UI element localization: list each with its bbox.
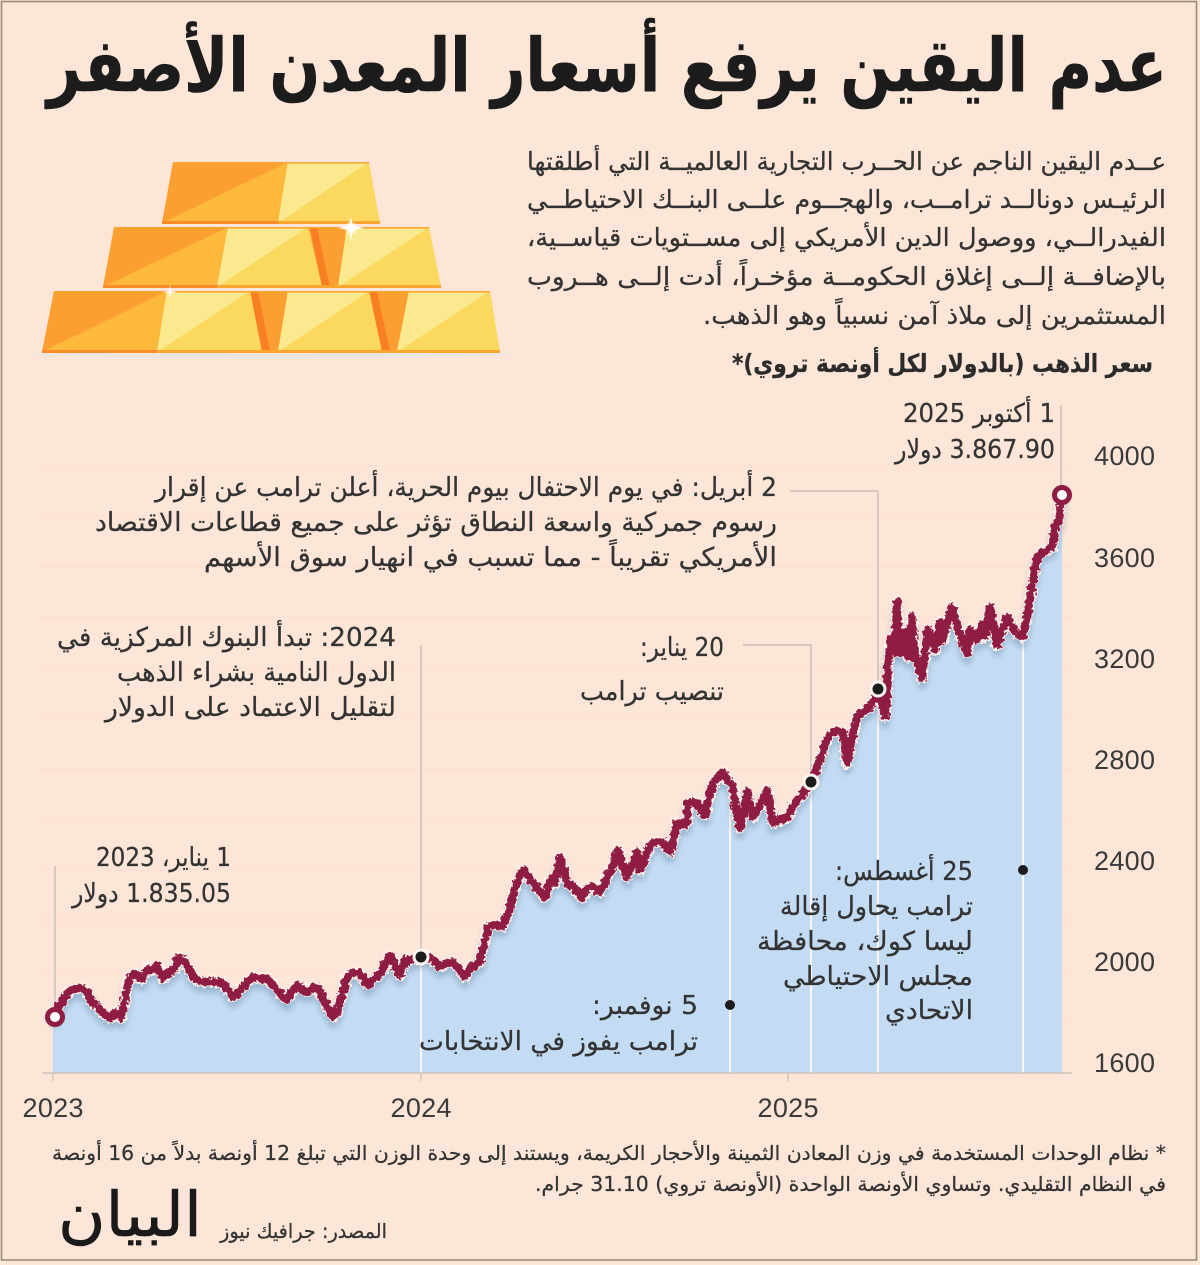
annotation: 2 April: رسوم جمركية واسعة النطاق تؤثر على جميع قطاعات الاقتصاد [95,508,777,538]
end marker [1054,488,1070,502]
annotation: 5 November: 5 نوفمبر: [592,991,698,1021]
annotation: 1 October 2025 [893,395,1055,465]
annotation: 20 January [580,633,724,707]
annotation: 25 August: ترامب يحاول إقالة [780,892,973,922]
y axis labels: 4000 [1094,441,1155,471]
annotation: 25 August: 25 أغسطس: [835,853,973,887]
start marker [48,1010,62,1024]
footnote: * نظام الوحدات المستخدمة في وزن المعادن الثمينة والأحجار الكريمة، ويستند إلى وحدة الوزن التي تبلغ 12 أونصة بدلاً من 16 أونصة [52,1140,1166,1166]
footnote [52,1140,1166,1197]
annotation: 1 October 2025: 3.867.90 دولار [893,435,1055,465]
annotation: 2 April [95,469,777,573]
area under the price line [53,495,1062,1073]
x axis labels: 2023 [22,1093,84,1123]
annotation: 25 August: مجلس الاحتياطي [783,962,973,992]
source: المصدر: جرافيك نيوز [219,1219,387,1243]
annotation: 25 August: ليسا كوك، محافظة [757,927,973,957]
footnote: في النظام التقليدي. وتساوي الأونصة الواحدة (الأونصة تروي) 31.10 جرام. [535,1172,1166,1197]
x axis labels [22,1093,818,1123]
annotation: 1 January 2023: 1 يناير، 2023 [96,843,231,873]
y axis labels: 3200 [1094,644,1155,674]
intro text block: الفيدرالــي، ووصول الدين الأمريكي إلى مســتويات قياســية، [527,221,1166,253]
annotation: 2024 central banks [57,619,396,723]
price line [55,495,1062,1024]
y axis labels: 2400 [1094,846,1155,876]
annotation: 5 November [419,991,698,1057]
annotation: 2024 central banks: 2024: تبدأ البنوك المركزية في [57,619,396,653]
intro text block: المستثمرين إلى ملاذ آمن نسبياً وهو الذهب. [703,298,1166,331]
white drop lines [421,637,1023,1073]
baseline and ticks [42,1073,1072,1081]
annotation: 2 April: 2 أبريل: في يوم الاحتفال بيوم الحرية، أعلن ترامب عن إقرار [153,469,777,503]
y axis labels [1094,441,1155,1078]
logo: Al Bayan: البيان [58,1178,202,1251]
annotation: 2 April: الأمريكي تقريباً - مما تسبب في انهيار سوق الأسهم [204,538,777,573]
intro text block: الرئيـس دونالــد ترامــب، والهجــوم علــى البنــك الاحتياطــي [527,185,1166,215]
event markers [414,682,1028,1010]
annotation: 2024 central banks: الدول النامية بشراء الذهب [117,658,396,688]
annotation: 5 November: ترامب يفوز في الانتخابات [419,1027,698,1057]
intro text block: عــدم اليقين الناجم عن الحــرب التجارية العالميــة التي أطلقتها [527,144,1166,177]
grey leader lines [55,405,1061,1010]
y axis labels: 1600 [1094,1048,1155,1078]
y axis labels: 3600 [1094,543,1155,573]
annotation: 1 January 2023: 1.835.05 دولار [70,879,231,909]
annotation: 20 January: تنصيب ترامب [580,677,724,707]
line chart: gold price [40,405,1072,1081]
annotation: 1 October 2025: 1 أكتوبر 2025 [903,395,1055,429]
x axis labels: 2024 [390,1093,452,1123]
annotation: 2024 central banks: لتقليل الاعتماد على الدولار [103,693,396,723]
intro text block: بالإضافــة إلــى إغلاق الحكومــة مؤخـراً، أدت إلــى هــروب [527,259,1166,292]
annotation: 25 August: الاتحادي [885,996,973,1026]
annotation: 20 January: 20 يناير: [640,633,724,663]
annotation: 25 August [757,853,973,1026]
x axis labels: 2025 [758,1093,818,1123]
y axis labels: 2800 [1094,745,1155,775]
icon: stacked gold bars [32,162,512,359]
intro text block [527,144,1166,331]
annotation: 1 January 2023 [70,843,231,909]
y axis labels: 2000 [1094,947,1155,977]
